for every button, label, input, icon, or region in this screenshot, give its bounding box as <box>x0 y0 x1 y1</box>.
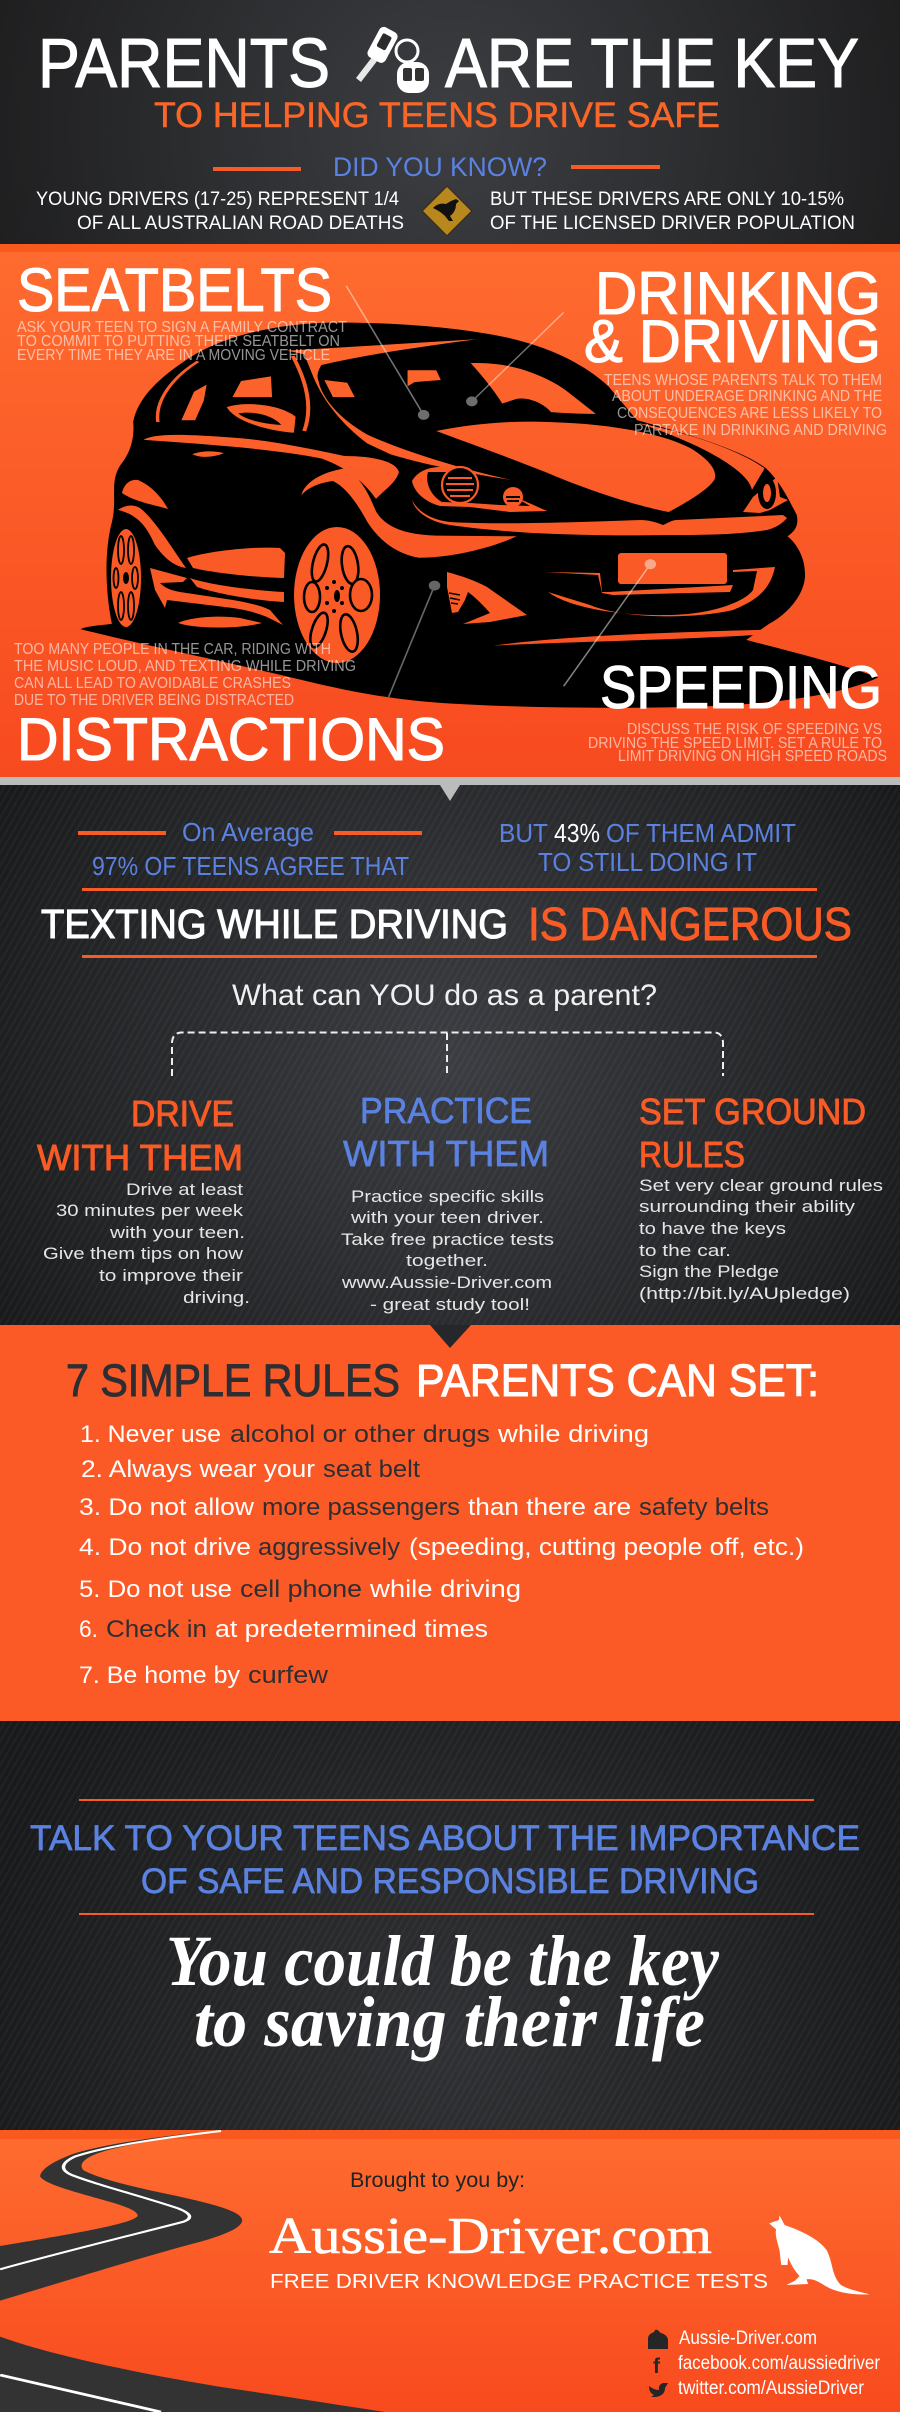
arrow: section pointer <box>440 785 460 801</box>
callout: speeding: DRIVING THE SPEED LIMIT. SET A RULE TO <box>588 735 882 752</box>
rules heading: PARENTS CAN SET: <box>416 1355 819 1406</box>
callout: seatbelts: EVERY TIME THEY ARE IN A MOVING VEHICLE <box>17 347 330 364</box>
rule 5 <box>79 1576 521 1603</box>
callout: drinking and driving <box>584 260 887 439</box>
dashed connector <box>172 1032 723 1076</box>
icon: car keys <box>356 25 429 93</box>
social: website: Aussie-Driver.com <box>679 2328 817 2349</box>
stat: young drivers deaths <box>36 189 404 234</box>
column: practice with them: Practice specific skills <box>351 1187 544 1206</box>
headline: texting is dangerous: TEXTING WHILE DRIVING <box>41 901 508 947</box>
rule 1: while driving <box>497 1421 649 1448</box>
stat: 97 percent agree <box>78 817 422 881</box>
column: practice with them: www.Aussie-Driver.com <box>341 1273 552 1292</box>
column: set ground rules: to the car. <box>639 1241 731 1260</box>
headline: texting is dangerous <box>41 898 852 950</box>
rule 4: (speeding, cutting people off, etc.) <box>409 1534 804 1561</box>
rule 4 <box>79 1534 804 1561</box>
stat: licensed driver share: OF THE LICENSED DRIVER POPULATION <box>490 213 855 234</box>
stat: 97 percent agree: On Average <box>182 817 314 847</box>
callout: distractions: THE MUSIC LOUD, AND TEXTING WHILE DRIVING <box>14 658 356 675</box>
callout: drinking and driving: CONSEQUENCES ARE LESS LIKELY TO <box>617 405 882 422</box>
callout: drinking and driving: & DRIVING <box>584 308 881 375</box>
rule 3: 3. Do not allow <box>79 1494 255 1521</box>
callout: distractions: DISTRACTIONS <box>17 706 445 773</box>
rule 4: 4. Do not drive <box>79 1534 251 1561</box>
column: set ground rules: (http://bit.ly/AUpledge) <box>639 1284 850 1303</box>
panel: texting and what parents can do <box>0 777 900 1325</box>
rule 6: Check in <box>106 1616 207 1643</box>
rule 1: alcohol or other drugs <box>230 1421 490 1448</box>
column: set ground rules: to have the keys <box>639 1219 786 1238</box>
right headlight <box>743 477 788 513</box>
stat: licensed driver share <box>490 189 855 234</box>
rule 6 <box>79 1616 488 1643</box>
callout: drinking and driving: ABOUT UNDERAGE DRINKING AND THE <box>612 388 882 405</box>
column: practice with them: together. <box>406 1251 488 1270</box>
column: practice with them: - great study tool! <box>370 1295 530 1314</box>
arrow: section notch <box>430 1325 471 1348</box>
column: drive with them: DRIVE <box>131 1093 234 1134</box>
call to action <box>30 1819 860 1901</box>
did you know heading <box>213 152 660 182</box>
title: parents: PARENTS <box>38 24 330 102</box>
column: practice with them: Take free practice tests <box>341 1230 554 1249</box>
stat: 43 percent admit: BUT <box>499 818 548 848</box>
callout: seatbelts: ASK YOUR TEEN TO SIGN A FAMILY CONTRACT <box>17 319 347 336</box>
car illustration <box>80 286 878 708</box>
illustration: winding road <box>0 2130 385 2412</box>
callout: seatbelts: SEATBELTS <box>17 256 332 324</box>
rule 4: aggressively <box>258 1534 400 1561</box>
rule 1: 1. Never use <box>80 1421 221 1448</box>
subtitle: TO HELPING TEENS DRIVE SAFE <box>154 96 720 135</box>
rule 2: seat belt <box>323 1456 420 1483</box>
callout line: distractions <box>389 581 440 697</box>
fog lamp <box>447 572 527 624</box>
logo: aussie driver: FREE DRIVER KNOWLEDGE PRACTICE TESTS <box>270 2271 768 2293</box>
icon: kangaroo road sign <box>422 186 472 236</box>
column: set ground rules: SET GROUND <box>639 1091 866 1132</box>
rule 6: 6. <box>79 1616 98 1643</box>
column: set ground rules <box>639 1091 883 1303</box>
callout: distractions: CAN ALL LEAD TO AVOIDABLE CRASHES <box>14 675 291 692</box>
column: drive with them: Drive at least <box>126 1180 243 1199</box>
callout line: drinking <box>466 312 564 406</box>
stat: young drivers deaths: OF ALL AUSTRALIAN ROAD DEATHS <box>77 213 404 234</box>
stat: 43 percent admit: TO STILL DOING IT <box>538 847 757 877</box>
callout line: speeding <box>564 559 656 686</box>
rear body panels <box>118 480 285 628</box>
callout: seatbelts <box>17 256 347 364</box>
callout: distractions: DUE TO THE DRIVER BEING DISTRACTED <box>14 692 294 709</box>
front wheel <box>294 527 380 663</box>
callout: distractions: TOO MANY PEOPLE IN THE CAR, RIDING WITH <box>14 641 331 658</box>
rule 5: 5. Do not use <box>79 1576 232 1603</box>
column: set ground rules: Sign the Pledge <box>639 1262 779 1281</box>
callout: speeding <box>588 654 887 765</box>
logo: aussie driver: Aussie-Driver.com <box>269 2208 712 2265</box>
social: facebook: f <box>653 2355 661 2378</box>
rule 7: curfew <box>248 1662 329 1689</box>
stat: 97 percent agree: 97% OF TEENS AGREE THAT <box>92 851 409 881</box>
callout: speeding: DISCUSS THE RISK OF SPEEDING VS <box>627 721 882 738</box>
column: drive with them: Give them tips on how <box>43 1244 244 1263</box>
call to action: TALK TO YOUR TEENS ABOUT THE IMPORTANCE <box>30 1819 860 1858</box>
rules heading <box>66 1355 819 1406</box>
social: twitter: twitter.com/AussieDriver <box>678 2378 865 2399</box>
panel: car and risks <box>0 244 900 777</box>
column: drive with them: WITH THEM <box>37 1137 243 1178</box>
social: facebook: facebook.com/aussiedriver <box>678 2353 881 2374</box>
rule 7 <box>79 1662 329 1689</box>
column: drive with them <box>37 1093 250 1307</box>
column: set ground rules: Set very clear ground rules <box>639 1176 883 1195</box>
rule 3: than there are <box>468 1494 631 1521</box>
rule 1 <box>80 1421 649 1448</box>
credit line: Brought to you by: <box>350 2169 525 2192</box>
panel: header <box>0 0 900 245</box>
rule 7: 7. Be home by <box>79 1662 240 1689</box>
rule 3: more passengers <box>262 1494 460 1521</box>
icon: kangaroo <box>769 2215 870 2295</box>
column: practice with them <box>341 1090 554 1314</box>
stat: 43 percent admit: OF THEM ADMIT <box>606 818 796 848</box>
callout lines <box>346 286 656 697</box>
script slogan <box>166 1921 720 2062</box>
did you know heading: DID YOU KNOW? <box>333 152 547 182</box>
stat: 43 percent admit: 43% <box>554 818 600 848</box>
rear wheel <box>111 529 141 627</box>
panel: seven simple rules <box>0 1325 900 1721</box>
rule 6: at predetermined times <box>215 1616 488 1643</box>
call to action: OF SAFE AND RESPONSIBLE DRIVING <box>141 1862 759 1901</box>
stat: young drivers deaths: YOUNG DRIVERS (17-25) REPRESENT 1/4 <box>36 189 399 210</box>
left headlight <box>412 467 547 512</box>
rule 3 <box>79 1494 769 1521</box>
logo: aussie driver <box>269 2208 768 2293</box>
stat: 43 percent admit <box>499 818 796 877</box>
script slogan: to saving their life <box>194 1982 705 2062</box>
rules heading: 7 SIMPLE RULES <box>66 1355 400 1406</box>
front bumper band <box>412 500 787 535</box>
rule 2: 2. Always wear your <box>81 1456 315 1483</box>
question heading: What can YOU do as a parent? <box>232 979 657 1012</box>
rule 5: cell phone <box>240 1576 362 1603</box>
column: practice with them: PRACTICE <box>360 1090 532 1131</box>
column: drive with them: to improve their <box>99 1266 243 1285</box>
panel: footer <box>0 2130 900 2412</box>
stat: licensed driver share: BUT THESE DRIVERS ARE ONLY 10-15% <box>490 189 844 210</box>
column: practice with them: with your teen driver. <box>350 1208 544 1227</box>
script slogan: You could be the key <box>166 1921 720 2001</box>
rule 5: while driving <box>369 1576 521 1603</box>
callout line: seatbelts <box>346 286 429 420</box>
column: practice with them: WITH THEM <box>343 1133 549 1174</box>
title: are the key: ARE THE KEY <box>445 24 859 102</box>
callout: seatbelts: TO COMMIT TO PUTTING THEIR SEATBELT ON <box>17 333 340 350</box>
social: facebook <box>653 2353 881 2378</box>
callout: drinking and driving: DRINKING <box>595 260 881 327</box>
column: drive with them: with your teen. <box>109 1223 245 1242</box>
column: drive with them: driving. <box>183 1288 250 1307</box>
headline: texting is dangerous: IS DANGEROUS <box>528 898 852 950</box>
rule 3: safety belts <box>639 1494 769 1521</box>
column: set ground rules: RULES <box>639 1134 745 1175</box>
number plate and grille <box>545 553 775 616</box>
column: set ground rules: surrounding their ability <box>639 1197 856 1216</box>
column: drive with them: 30 minutes per week <box>56 1201 244 1220</box>
rule 2 <box>81 1456 420 1483</box>
callout: distractions <box>14 641 445 773</box>
panel: talk to your teens <box>0 1721 900 2130</box>
